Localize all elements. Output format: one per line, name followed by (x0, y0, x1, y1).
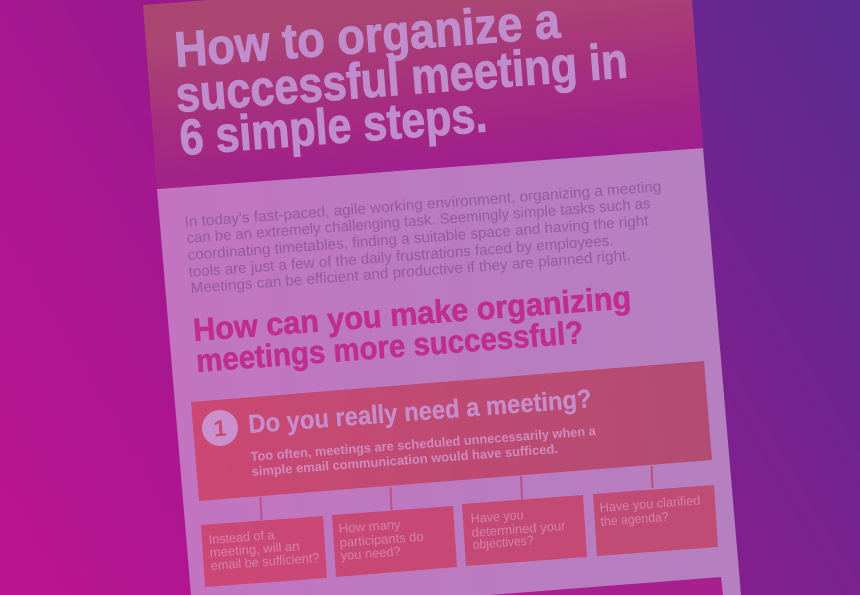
card: question 2: How many (338, 516, 402, 536)
card: question 2: you need? (340, 544, 401, 563)
card: question 4 (593, 485, 718, 556)
icon: step number 1: 1 (213, 415, 228, 441)
card: question 4: Have you clarified (599, 492, 701, 515)
card: question 1 (201, 516, 327, 587)
intro paragraph: tools are just a few of the daily frustrations faced by employees. (188, 232, 614, 281)
step 1 heading: Do you really need a meeting? (247, 383, 592, 439)
step 1 description: Too often, meetings are scheduled unnecessarily when a (250, 423, 597, 464)
card: question 3: Have you (470, 507, 524, 526)
connector: step to question 3 (520, 476, 523, 499)
section heading: How can you make organizing (192, 279, 632, 348)
connector: step to question 1 (260, 497, 262, 520)
card: question 3: determined your (471, 518, 567, 540)
card: question 1: meeting, will an (209, 538, 300, 560)
title: successful meeting in (174, 32, 630, 123)
connector: step to question 4 (650, 466, 654, 488)
intro paragraph: In today's fast-paced, agile working environment, organizing a meeting (184, 178, 662, 231)
card: question 1: email be sufficient? (210, 550, 320, 573)
icon: step number 1 (202, 410, 238, 446)
section heading (192, 279, 632, 379)
panel: step 1 (191, 361, 712, 501)
panel: paper sheet (157, 148, 741, 595)
card: question 2 (332, 506, 457, 577)
intro paragraph (184, 178, 662, 297)
intro paragraph: coordinating timetables, finding a suitable space and having the right (187, 212, 650, 264)
intro paragraph: Meetings can be efficient and productive if they are planned right. (190, 247, 631, 297)
panel: next step header, cropped (490, 577, 723, 595)
section heading: meetings more successful? (195, 314, 584, 379)
card: question 4: the agenda? (600, 509, 669, 529)
step 1 description: simple email communication would have sufficed. (251, 441, 558, 479)
card: question 2: participants do (339, 529, 424, 550)
card: question 3: objectives? (472, 532, 534, 552)
title: 6 simple steps. (178, 87, 489, 166)
connector: step to question 2 (390, 487, 392, 510)
card: question 1: Instead of a (208, 527, 276, 547)
card: question 3 (462, 495, 587, 566)
intro paragraph: can be an extremely challenging task. Seemingly simple tasks such as (186, 195, 651, 247)
title (173, 0, 630, 166)
panel: title header (143, 0, 703, 189)
